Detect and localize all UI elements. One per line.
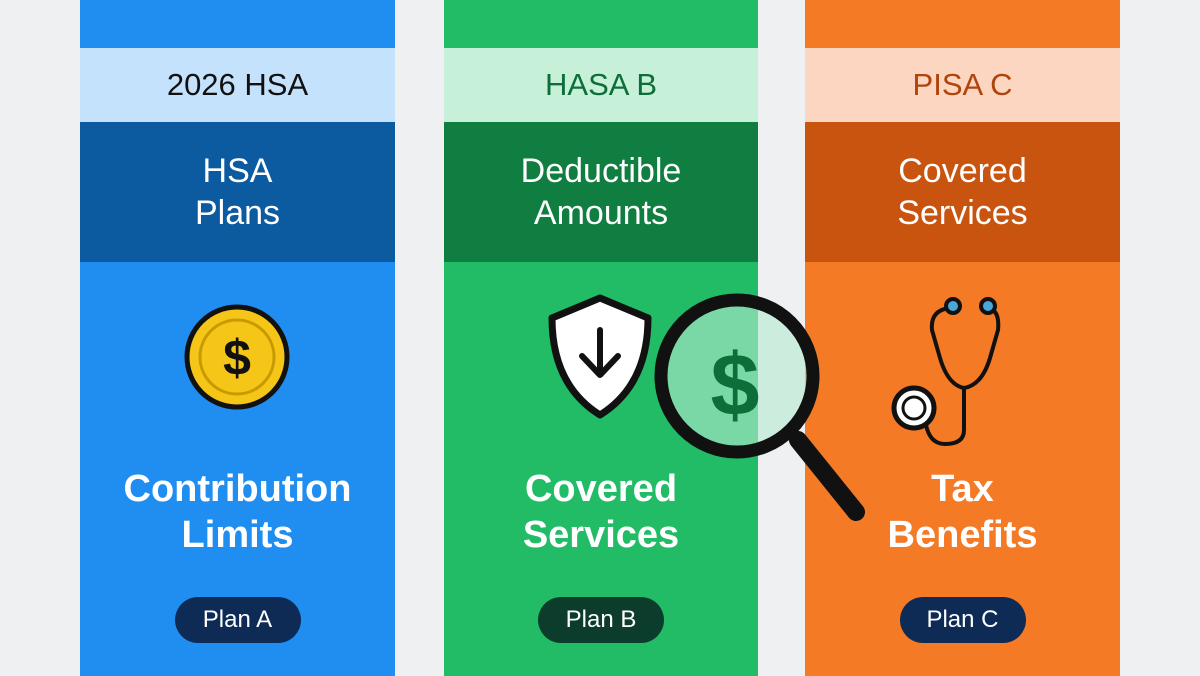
label: Covered Services: Services	[523, 514, 679, 556]
header: HASA B: HASA B	[545, 67, 657, 102]
header: HASA B	[444, 48, 758, 122]
icon: magnifier with dollar	[661, 300, 856, 512]
header: 2026 HSA	[80, 48, 395, 122]
panel: green deductible	[444, 0, 758, 676]
pill: Plan B	[538, 597, 664, 643]
pill: Plan C: Plan C	[926, 606, 999, 633]
subheader: Deductible Amounts	[444, 122, 758, 262]
icon: stethoscope	[894, 299, 998, 444]
subheader: Deductible Amounts: Deductible	[521, 152, 681, 190]
label: Covered Services	[523, 468, 679, 556]
pill: Plan A	[174, 597, 300, 643]
icon: magnifier with dollar: $	[711, 335, 759, 434]
subheader: HSA Plans	[80, 122, 395, 262]
icon: dollar coin	[187, 307, 287, 407]
panel: orange covered services	[805, 0, 1120, 676]
label: Tax Benefits: Tax	[931, 468, 994, 510]
label: Tax Benefits: Benefits	[888, 514, 1037, 556]
label: Contribution Limits	[124, 468, 351, 556]
pill: Plan C	[900, 597, 1026, 643]
header: PISA C	[805, 48, 1120, 122]
label: Covered Services: Covered	[525, 468, 677, 510]
subheader: Deductible Amounts: Amounts	[534, 194, 668, 232]
header: PISA C: PISA C	[913, 67, 1012, 102]
label: Contribution Limits: Limits	[182, 514, 293, 556]
subheader: HSA Plans: Plans	[195, 194, 280, 232]
label: Tax Benefits	[888, 468, 1037, 556]
subheader: Covered Services: Covered	[898, 152, 1027, 190]
subheader: Covered Services: Services	[897, 194, 1028, 232]
subheader: Covered Services	[805, 122, 1120, 262]
icon: dollar coin: $	[223, 330, 251, 386]
subheader: HSA Plans: HSA	[203, 152, 272, 190]
pill: Plan B: Plan B	[566, 606, 636, 633]
panel: blue HSA plans	[80, 0, 395, 676]
header: 2026 HSA: 2026 HSA	[167, 67, 308, 102]
pill: Plan A: Plan A	[203, 606, 272, 633]
icon: shield with arrow	[552, 298, 648, 415]
label: Contribution Limits: Contribution	[124, 468, 351, 510]
